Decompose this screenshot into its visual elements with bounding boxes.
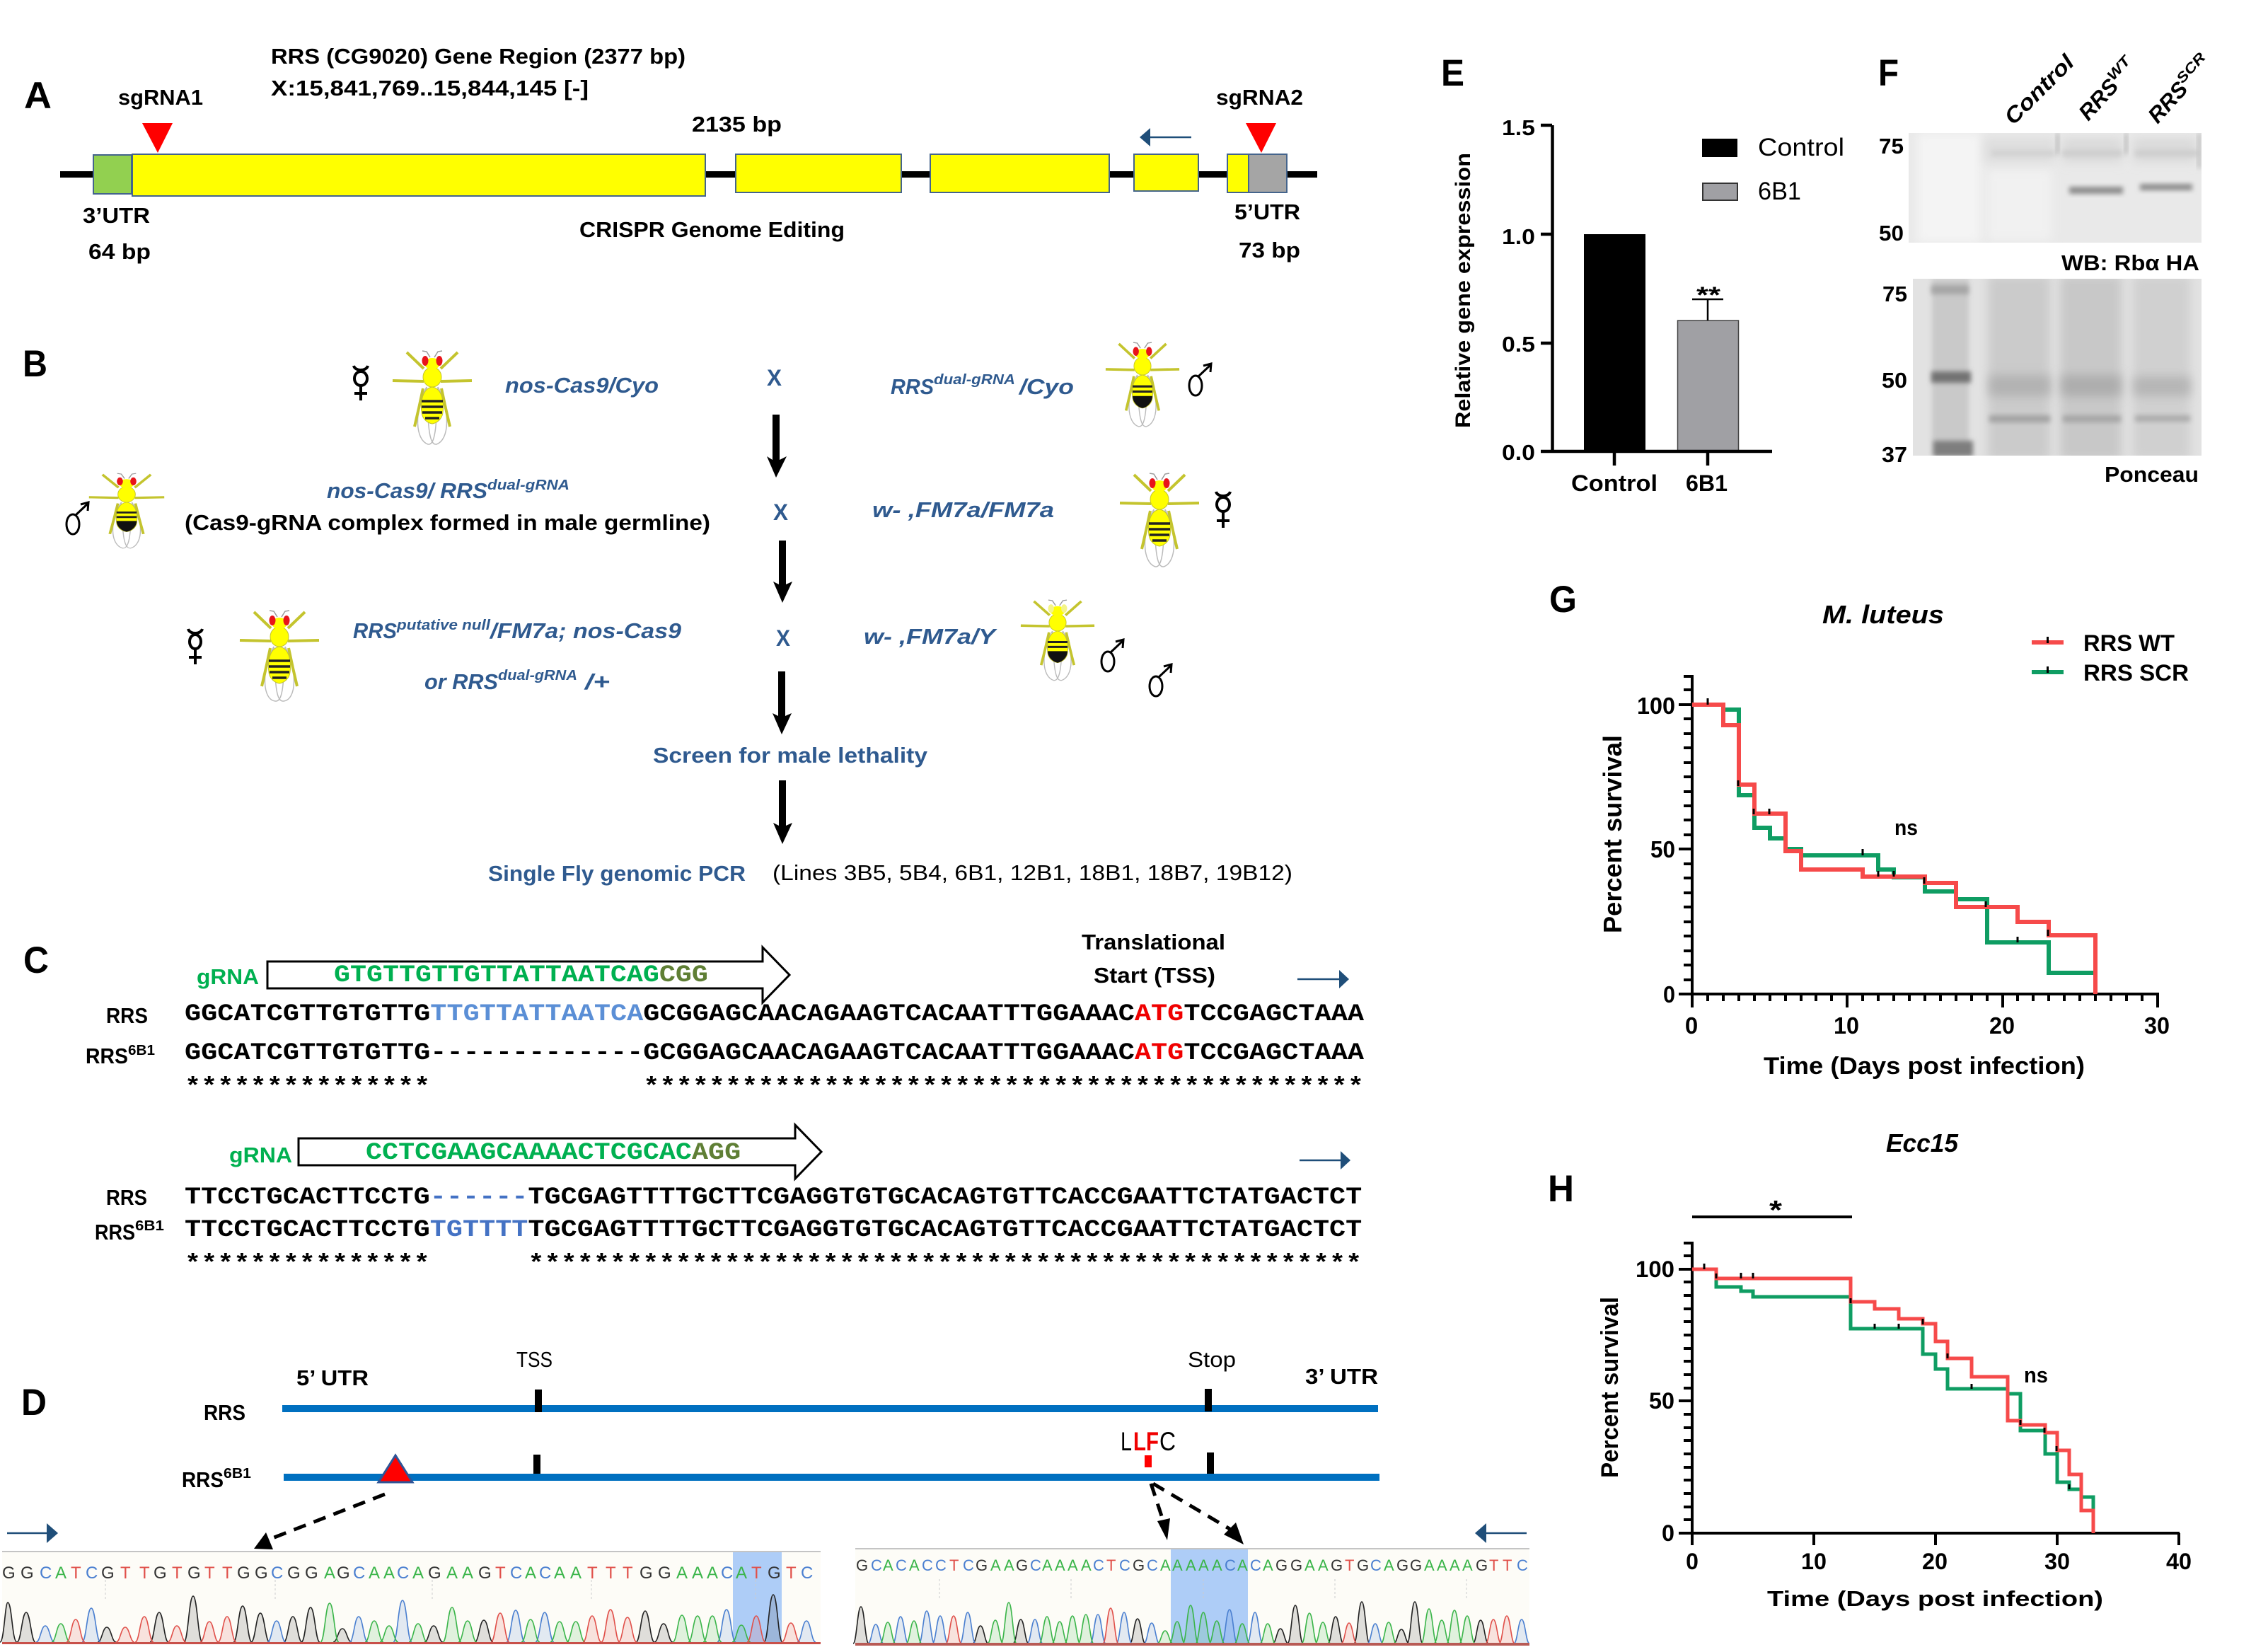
sequence RRS 1: GGCATCGTTGTGTTGTTGTTATTAATCAGCGGAGCAACAGAAGTCACAATTTGGAAACATGTCCGAGCTAAA <box>185 1000 1364 1027</box>
gRNA label 2: gRNA <box>229 1143 292 1167</box>
chromatogram right: C <box>1517 1556 1528 1574</box>
chromatogram left: G <box>305 1564 318 1583</box>
panel C: sequence alignments <box>23 930 1364 1278</box>
chromatogram left: A <box>324 1564 335 1583</box>
panel letter F: F <box>1878 52 1899 94</box>
chromatogram left: T <box>71 1564 81 1583</box>
y tick labels <box>1637 693 1675 1007</box>
genotype: nos-Cas9/Cyo: nos-Cas9/Cyo <box>505 373 659 398</box>
x tick labels: 10 <box>1834 1012 1859 1039</box>
genotype: RRS dual-gRNA /Cyo: dual-gRNA <box>934 372 1015 388</box>
y axis title: Relative gene expression <box>1452 153 1475 428</box>
5 prime UTR label: 73 bp <box>1239 238 1300 262</box>
y tick labels: 1.5 <box>1502 115 1535 140</box>
curve RRS SCR <box>1692 705 2095 994</box>
x tick labels: 40 <box>2166 1549 2192 1574</box>
x tick labels: 6B1 <box>1686 470 1728 496</box>
chromatogram right: G <box>1290 1556 1302 1574</box>
chromatogram right: A <box>1437 1556 1447 1574</box>
genotype: w- FM7a/FM7a: w- ,FM7a/FM7a <box>872 497 1054 522</box>
lane label RRS SCR: SCR <box>2174 50 2209 86</box>
icon: fly male 2 <box>89 473 164 548</box>
icon: fly female 3 <box>240 611 319 701</box>
RRS6B1 transcript line with ticks <box>284 1452 1379 1481</box>
x tick labels: 20 <box>1922 1549 1948 1574</box>
translational start label <box>1082 930 1225 988</box>
chromatogram right: G <box>1016 1556 1028 1574</box>
chromatogram left: G <box>21 1564 34 1583</box>
chromatogram right: G <box>1357 1556 1369 1574</box>
chromatogram left: A <box>554 1564 565 1583</box>
legend <box>1702 134 1844 205</box>
axes and ticks <box>1541 125 1772 466</box>
chromatogram left: G <box>337 1564 350 1583</box>
y tick labels: 0 <box>1663 981 1675 1007</box>
chromatogram left: G <box>101 1564 115 1583</box>
RRS6B1 label 1: 6B1 <box>128 1043 155 1058</box>
lane label RRS WT: RRS <box>2073 74 2124 125</box>
chromatogram left: T <box>786 1564 797 1583</box>
y tick labels: 0.5 <box>1502 332 1535 357</box>
gRNA arrow box 1 <box>267 947 789 1003</box>
censor ticks <box>1708 698 2048 942</box>
ns annotation: ns <box>2024 1363 2048 1387</box>
panel letter A: A <box>24 75 52 117</box>
chromatogram left <box>0 1551 821 1644</box>
chromatogram right: A <box>1172 1556 1183 1574</box>
chromatogram left: G <box>428 1564 441 1583</box>
blot bottom mass markers <box>1882 282 1907 467</box>
chromatogram left: A <box>707 1564 718 1583</box>
lane label RRS WT: WT <box>2105 52 2135 83</box>
chromatogram left: C <box>721 1564 733 1583</box>
chromatogram left: G <box>2 1564 16 1583</box>
y tick labels: 50 <box>1650 836 1675 862</box>
chromatogram left: C <box>271 1564 283 1583</box>
RRS label 1: RRS <box>106 1003 148 1028</box>
RRS6B1 label <box>182 1466 251 1492</box>
chromatogram right: C <box>871 1556 882 1574</box>
chromatogram left: G <box>478 1564 492 1583</box>
chromatogram left: G <box>640 1564 653 1583</box>
x axis title: Time (Days post infection) <box>1764 1053 2085 1080</box>
genotype: or RRS dual-gRNA /+ <box>424 668 610 694</box>
blot top image <box>1909 133 2202 243</box>
chromatogram right: C <box>1147 1556 1158 1574</box>
icon: female symbol 2 <box>1216 492 1230 528</box>
chromatogram left: A <box>525 1564 536 1583</box>
chromatogram left: T <box>495 1564 506 1583</box>
x tick labels: 0 <box>1686 1549 1699 1574</box>
chromatogram left: G <box>768 1564 781 1583</box>
conservation stars 1: *************** ******************************************** <box>185 1074 1364 1101</box>
icon: fly male 1 <box>1106 342 1179 427</box>
significance bar: * <box>1769 1196 1782 1225</box>
genotype: or RRS dual-gRNA /+: or RRS <box>424 669 498 694</box>
chromatogram right: A <box>1462 1556 1473 1574</box>
panel E: relative gene expression bar chart <box>1441 52 1844 496</box>
chromatogram right: T <box>1106 1556 1116 1574</box>
panel D: transcript schematic and chromatograms <box>0 1347 1529 1646</box>
genotype: RRS putative null/FM7a; nos-Cas9 <box>353 618 682 643</box>
chromatogram right: A <box>1212 1556 1222 1574</box>
translational start label: Translational <box>1082 930 1225 954</box>
blot bottom mass markers: 37 <box>1882 442 1907 467</box>
panel letter E: E <box>1441 52 1464 94</box>
chromatogram right: G <box>976 1556 988 1574</box>
chromatogram right: G <box>856 1556 868 1574</box>
chromatogram right: C <box>1225 1556 1236 1574</box>
y tick labels: 0 <box>1662 1520 1674 1546</box>
chart title: Ecc15 <box>1886 1128 1959 1157</box>
panel G: survival curve M. luteus <box>1549 579 2189 1080</box>
y tick labels: 100 <box>1636 1257 1674 1282</box>
chromatogram left: T <box>623 1564 633 1583</box>
chromatogram left: A <box>570 1564 582 1583</box>
y axis title: Percent survival <box>1598 735 1627 933</box>
chromatogram left: T <box>587 1564 598 1583</box>
lane label Control: Control <box>1999 49 2080 129</box>
blot top mass markers: 75 <box>1879 134 1904 158</box>
chromatogram right: C <box>922 1556 933 1574</box>
chromatogram left: C <box>86 1564 98 1583</box>
genotype: RRS dual-gRNA /Cyo: /Cyo <box>1018 374 1074 399</box>
blot top mass markers: 50 <box>1879 221 1904 246</box>
icon: fly female 2 <box>1120 473 1199 567</box>
y axis title: Percent survival <box>1597 1297 1624 1478</box>
chromatogram left: G <box>658 1564 671 1583</box>
arrow: direction 1 <box>1297 970 1349 988</box>
panel H: survival curve Ecc15 <box>1548 1128 2192 1611</box>
chromatogram right: G <box>1396 1556 1408 1574</box>
icon: male symbol 3b <box>1150 664 1171 696</box>
legend <box>2032 630 2189 686</box>
chromatogram left: T <box>606 1564 616 1583</box>
y tick labels <box>1636 1257 1674 1546</box>
cross symbol X 3: X <box>776 625 791 651</box>
genotype: nos-Cas9/ RRS dual-gRNA <box>327 478 569 503</box>
sequence RRS6B1 1: GGCATCGTTGTGTTG-------------GCGGAGCAACAGAAGTCACAATTTGGAAACATGTCCGAGCTAAA <box>185 1039 1364 1066</box>
cross symbol X 2: X <box>773 499 789 525</box>
lane label RRS SCR <box>2142 50 2216 128</box>
chromatogram right: T <box>949 1556 959 1574</box>
chromatogram right: A <box>909 1556 920 1574</box>
chromatogram left: A <box>383 1564 395 1583</box>
chromatogram left: T <box>751 1564 762 1583</box>
legend: 6B1 <box>1758 178 1801 205</box>
chromatogram left: C <box>353 1564 365 1583</box>
icon: male symbol 3a <box>1101 640 1123 671</box>
genotype: RRS dual-gRNA /Cyo: RRS <box>891 374 934 399</box>
chromatogram right: C <box>935 1556 947 1574</box>
arrow: left chromatogram direction <box>7 1523 58 1543</box>
chromatogram right: A <box>1042 1556 1053 1574</box>
chromatogram left: A <box>736 1564 747 1583</box>
cross symbol X 1: X <box>767 365 782 391</box>
chromatogram right: A <box>1198 1556 1209 1574</box>
blot bottom ponceau image <box>1913 276 2202 460</box>
x tick labels: 30 <box>2044 1549 2070 1574</box>
RRS6B1 label: RRS <box>182 1467 224 1492</box>
y tick labels: 1.0 <box>1502 224 1535 249</box>
bars <box>1584 234 1739 451</box>
icon: female symbol 1 <box>354 366 368 400</box>
icon: female symbol 3 <box>188 629 202 664</box>
arrow: cross 3 to screen <box>773 671 792 734</box>
RRS transcript line with ticks <box>282 1389 1378 1412</box>
chromatogram left: C <box>40 1564 52 1583</box>
genotype: RRS putative null/FM7a; nos-Cas9: /FM7a; nos-Cas9 <box>489 618 682 643</box>
chromatogram right: A <box>1160 1556 1171 1574</box>
legend: RRS SCR <box>2083 660 2189 686</box>
panel A: gene region diagram <box>24 44 1317 264</box>
chromatogram left: T <box>139 1564 150 1583</box>
Ponceau label: Ponceau <box>2105 462 2199 487</box>
chromatogram left: C <box>510 1564 522 1583</box>
WB label: WB: Rbα HA <box>2061 250 2199 275</box>
panel letter B: B <box>23 343 47 385</box>
icon: red triangle sgRNA2 <box>1246 123 1276 153</box>
chromatogram left: A <box>676 1564 688 1583</box>
2135 bp label: 2135 bp <box>692 112 782 137</box>
ns annotation: ns <box>1894 815 1918 840</box>
RRS6B1 label 2: RRS <box>95 1220 135 1244</box>
blot top mass markers <box>1879 134 1904 246</box>
genotype: RRS dual-gRNA /Cyo <box>891 372 1074 399</box>
RRS6B1 label 1: RRS <box>86 1044 128 1068</box>
RRS label 2: RRS <box>106 1185 147 1210</box>
arrow: cross 1 to 2 <box>767 415 787 478</box>
chromatogram right: A <box>1055 1556 1065 1574</box>
conservation stars 2: *************** *************************************************** <box>185 1251 1362 1278</box>
arrow: dashed to left chromatogram <box>254 1494 385 1549</box>
LLFC label: L <box>1121 1427 1132 1456</box>
RRS6B1 label 2: 6B1 <box>135 1218 164 1234</box>
LLFC label <box>1121 1427 1176 1456</box>
lane label RRS SCR: RRS <box>2143 76 2193 128</box>
chromatogram right: C <box>1030 1556 1041 1574</box>
chromatogram right: A <box>1263 1556 1273 1574</box>
chromatogram right: C <box>1093 1556 1104 1574</box>
chromatogram right: A <box>990 1556 1001 1574</box>
chromatogram right <box>853 1548 1529 1646</box>
5 prime UTR label: 5’ UTR <box>296 1365 369 1390</box>
chromatogram right: C <box>1370 1556 1382 1574</box>
panel letter D: D <box>21 1382 47 1423</box>
axes and ticks <box>1679 1242 2180 1545</box>
single fly genomic PCR: Single Fly genomic PCR <box>488 861 746 886</box>
RRS6B1 label: 6B1 <box>224 1466 251 1481</box>
chromatogram right: A <box>1424 1556 1435 1574</box>
chromatogram left: A <box>692 1564 703 1583</box>
chromatogram right: C <box>1250 1556 1261 1574</box>
legend: Control <box>1758 134 1844 161</box>
y tick labels: 0.0 <box>1502 440 1535 465</box>
panel letter H: H <box>1548 1168 1574 1210</box>
x tick labels: Control <box>1571 470 1657 496</box>
gRNA sequence 1: GTGTTGTTGTTATTAATCAGCGG <box>334 961 708 988</box>
icon: fly male 3 white eye <box>1021 600 1094 681</box>
CRISPR label: CRISPR Genome Editing <box>579 217 845 242</box>
note: Cas9-gRNA complex: (Cas9-gRNA complex formed in male germline) <box>185 510 710 535</box>
translational start label: Start (TSS) <box>1094 963 1215 988</box>
Stop label: Stop <box>1188 1347 1236 1372</box>
y tick labels <box>1502 115 1535 465</box>
sgRNA2 label: sgRNA2 <box>1216 85 1303 110</box>
curve RRS WT <box>1692 705 2095 994</box>
genotype: RRS putative null/FM7a; nos-Cas9: putative null <box>396 618 490 633</box>
LLFC label: C <box>1159 1427 1176 1456</box>
x tick labels <box>1571 470 1728 496</box>
chromatogram left: T <box>120 1564 131 1583</box>
y tick labels: 100 <box>1637 693 1675 719</box>
chromatogram right: T <box>1489 1556 1498 1574</box>
lane label RRS WT <box>2073 52 2142 125</box>
genotype: or RRS dual-gRNA /+: /+ <box>583 669 610 694</box>
chromatogram right: A <box>1186 1556 1196 1574</box>
arrow: screen to PCR <box>773 780 792 844</box>
icon: red triangle sgRNA1 <box>142 123 173 153</box>
axes and ticks <box>1679 675 2159 1007</box>
RRS6B1 label 2 <box>95 1218 164 1244</box>
chromatogram left: A <box>446 1564 458 1583</box>
gene region title <box>271 44 685 100</box>
chromatogram left: T <box>204 1564 215 1583</box>
arrow: direction 2 <box>1300 1151 1350 1169</box>
chart title: M. luteus <box>1822 600 1944 629</box>
panel letter C: C <box>23 940 49 981</box>
sgRNA1 label: sgRNA1 <box>118 85 203 110</box>
icon: deletion triangle <box>378 1455 412 1482</box>
RRS6B1 label 1 <box>86 1043 155 1068</box>
chromatogram right: G <box>1275 1556 1288 1574</box>
chromatogram left: G <box>287 1564 301 1583</box>
5 prime UTR label: 5’UTR <box>1234 200 1300 224</box>
genotype: or RRS dual-gRNA /+: dual-gRNA <box>498 668 577 683</box>
legend: RRS WT <box>2083 630 2175 656</box>
arrow: dashed to right chromatogram b <box>1153 1484 1244 1544</box>
arrow: right chromatogram direction <box>1475 1523 1527 1543</box>
panel B: crossing scheme <box>23 342 1292 886</box>
icon: male symbol 2 <box>66 502 88 534</box>
gene region title: RRS (CG9020) Gene Region (2377 bp) <box>271 44 685 69</box>
genotype: RRS putative null/FM7a; nos-Cas9: RRS <box>353 618 397 643</box>
chromatogram left: C <box>397 1564 409 1583</box>
x tick labels: 0 <box>1685 1012 1698 1039</box>
x tick labels: 30 <box>2144 1012 2170 1039</box>
gRNA arrow box 2 <box>299 1125 821 1179</box>
sequence RRS6B1 2: TTCCTGCACTTCCTGTGTTTTTGCGAGTTTTGCTTCGAGGTGTGCACAGTGTTCACCGAATTCTATGACTCT <box>185 1216 1362 1243</box>
chromatogram right: A <box>1304 1556 1315 1574</box>
chromatogram right: A <box>883 1556 893 1574</box>
blot bottom mass markers: 75 <box>1882 282 1907 306</box>
chromatogram left: G <box>154 1564 167 1583</box>
sequence RRS 2: TTCCTGCACTTCCTG------TGCGAGTTTTGCTTCGAGGTGTGCACAGTGTTCACCGAATTCTATGACTCT <box>185 1184 1362 1211</box>
arrow: cross 2 to 3 <box>773 541 792 603</box>
icon: male symbol 1 <box>1189 364 1211 395</box>
chromatogram left: C <box>801 1564 813 1583</box>
x tick labels: 20 <box>1989 1012 2015 1039</box>
3 prime UTR label: 3’ UTR <box>1305 1364 1378 1389</box>
x tick labels: 10 <box>1801 1549 1827 1574</box>
x axis title: Time (Days post infection) <box>1767 1586 2103 1611</box>
genotype: nos-Cas9/ RRS dual-gRNA: nos-Cas9/ RRS <box>327 478 487 503</box>
chromatogram left: C <box>539 1564 551 1583</box>
chromatogram left: G <box>255 1564 268 1583</box>
LLFC label: LF <box>1133 1427 1159 1456</box>
3 prime UTR label: 64 bp <box>88 239 151 264</box>
icon: fly female 1 <box>393 351 472 444</box>
genotype: nos-Cas9/ RRS dual-gRNA: dual-gRNA <box>487 478 569 493</box>
chromatogram left: A <box>462 1564 473 1583</box>
gRNA sequence 2: CCTCGAAGCAAAACTCGCACAGG <box>366 1139 741 1166</box>
chromatogram right: A <box>1004 1556 1014 1574</box>
curve RRS SCR <box>1692 1269 2093 1533</box>
chromatogram left: A <box>55 1564 66 1583</box>
chromatogram right: G <box>1133 1556 1145 1574</box>
chromatogram right: G <box>1410 1556 1422 1574</box>
curve RRS WT <box>1692 1269 2093 1533</box>
chromatogram right: A <box>1450 1556 1460 1574</box>
panel letter G: G <box>1549 579 1577 620</box>
chromatogram right: A <box>1318 1556 1329 1574</box>
screen for male lethality: Screen for male lethality <box>653 743 928 768</box>
chromatogram right: C <box>963 1556 974 1574</box>
arrow: transcription direction <box>1140 128 1191 146</box>
genotype: w- FM7a/Y: w- ,FM7a/Y <box>864 624 998 649</box>
RRS label: RRS <box>204 1400 245 1425</box>
chromatogram right: C <box>896 1556 907 1574</box>
chromatogram left: G <box>187 1564 201 1583</box>
line list: (Lines 3B5, 5B4, 6B1, 12B1, 18B1, 18B7, 19B12) <box>773 860 1292 885</box>
chromatogram right: C <box>1119 1556 1130 1574</box>
chromatogram right: G <box>1331 1556 1343 1574</box>
gene region title: X:15,841,769..15,844,145 [-] <box>271 76 589 100</box>
chromatogram right: A <box>1237 1556 1248 1574</box>
chromatogram left: A <box>412 1564 424 1583</box>
censor ticks <box>1704 1264 2069 1489</box>
TSS label: TSS <box>516 1347 552 1372</box>
y tick labels: 50 <box>1649 1388 1674 1414</box>
x tick labels <box>1686 1549 2192 1574</box>
panel F: western blot <box>1878 49 2216 487</box>
3 prime UTR label: 3’UTR <box>83 203 150 228</box>
x tick labels <box>1685 1012 2170 1039</box>
chromatogram left: T <box>222 1564 233 1583</box>
blot bottom mass markers: 50 <box>1882 368 1907 393</box>
3 prime UTR label <box>83 203 151 264</box>
chromatogram left: G <box>237 1564 250 1583</box>
chromatogram right: T <box>1503 1556 1512 1574</box>
significance stars: ** <box>1696 282 1721 308</box>
gRNA label 1: gRNA <box>197 964 259 989</box>
chromatogram left: T <box>172 1564 183 1583</box>
arrow: dashed to right chromatogram a <box>1151 1484 1170 1540</box>
chromatogram right: A <box>1081 1556 1092 1574</box>
chromatogram right: T <box>1345 1556 1354 1574</box>
gene model: exons and UTRs <box>60 154 1317 196</box>
chromatogram right: A <box>1068 1556 1078 1574</box>
chromatogram left: A <box>369 1564 380 1583</box>
chromatogram right: A <box>1384 1556 1394 1574</box>
chromatogram right: G <box>1476 1556 1488 1574</box>
5 prime UTR label <box>1234 200 1300 262</box>
